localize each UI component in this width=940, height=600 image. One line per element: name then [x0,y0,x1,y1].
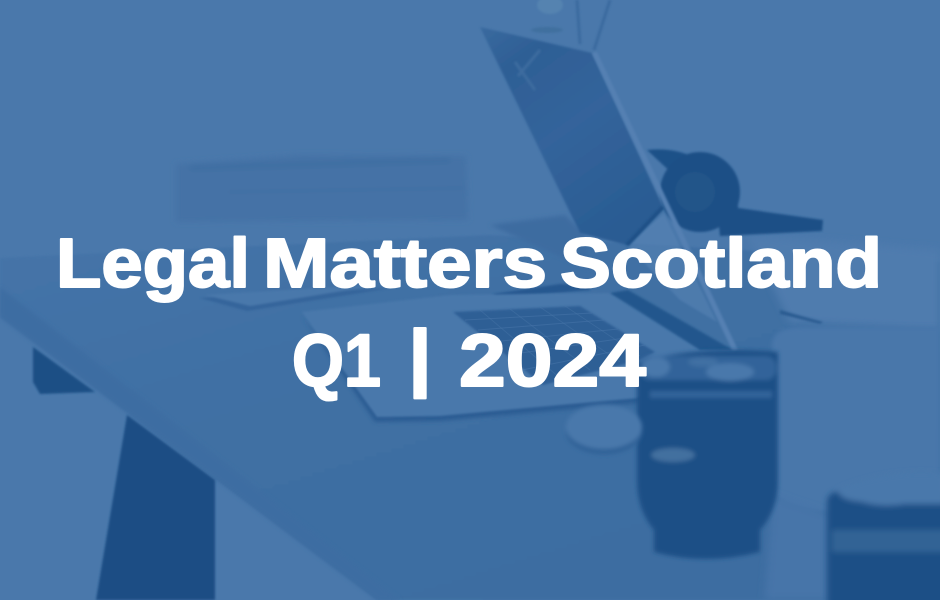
title [56,224,882,402]
tablet on desk [200,284,392,311]
mug ring [650,391,772,398]
headphone band [647,149,738,215]
table leg bracket [33,347,95,394]
mug top highlights [640,356,776,380]
dark pen on desk [493,284,590,298]
coffee cup at right [772,327,940,512]
computer mouse [566,405,642,454]
title line 1: Scotland: Scotland [560,224,882,302]
headphone ear cup [660,152,740,232]
table leg [96,415,215,600]
light paper at right [747,235,940,330]
laptop base shadow [302,316,640,422]
title line 2: Q1: Q1 [292,319,381,402]
laptop screen [480,27,663,245]
laptop keyboard [453,306,655,385]
laptop inner lid area [627,214,717,322]
coffee cup base [765,495,830,600]
laptop base [302,293,735,417]
laptop screen reflection [515,50,540,90]
mug label [651,448,695,462]
desk front edge [0,287,400,600]
table leg highlight [148,432,150,600]
stack of books [176,155,468,222]
laptop hinge [610,290,733,350]
plant on shelf [531,0,610,50]
camera lens mug [637,350,778,559]
dark pen strip at right [780,310,823,324]
laptop screen rim [592,52,738,352]
lens ring [832,530,940,552]
desk surface [0,235,940,600]
title line 2: 2024: 2024 [459,319,646,402]
headphone base [717,205,823,236]
second lens at lower right [827,473,940,600]
title line 1: Matters: Matters [263,224,547,302]
headphones [647,149,823,236]
items behind laptop [490,215,590,270]
title line 1: Legal: Legal [56,224,250,302]
title line 2: separator: | [408,315,432,399]
lens highlight [838,473,940,506]
laptop screen hinge shadow [627,207,663,245]
